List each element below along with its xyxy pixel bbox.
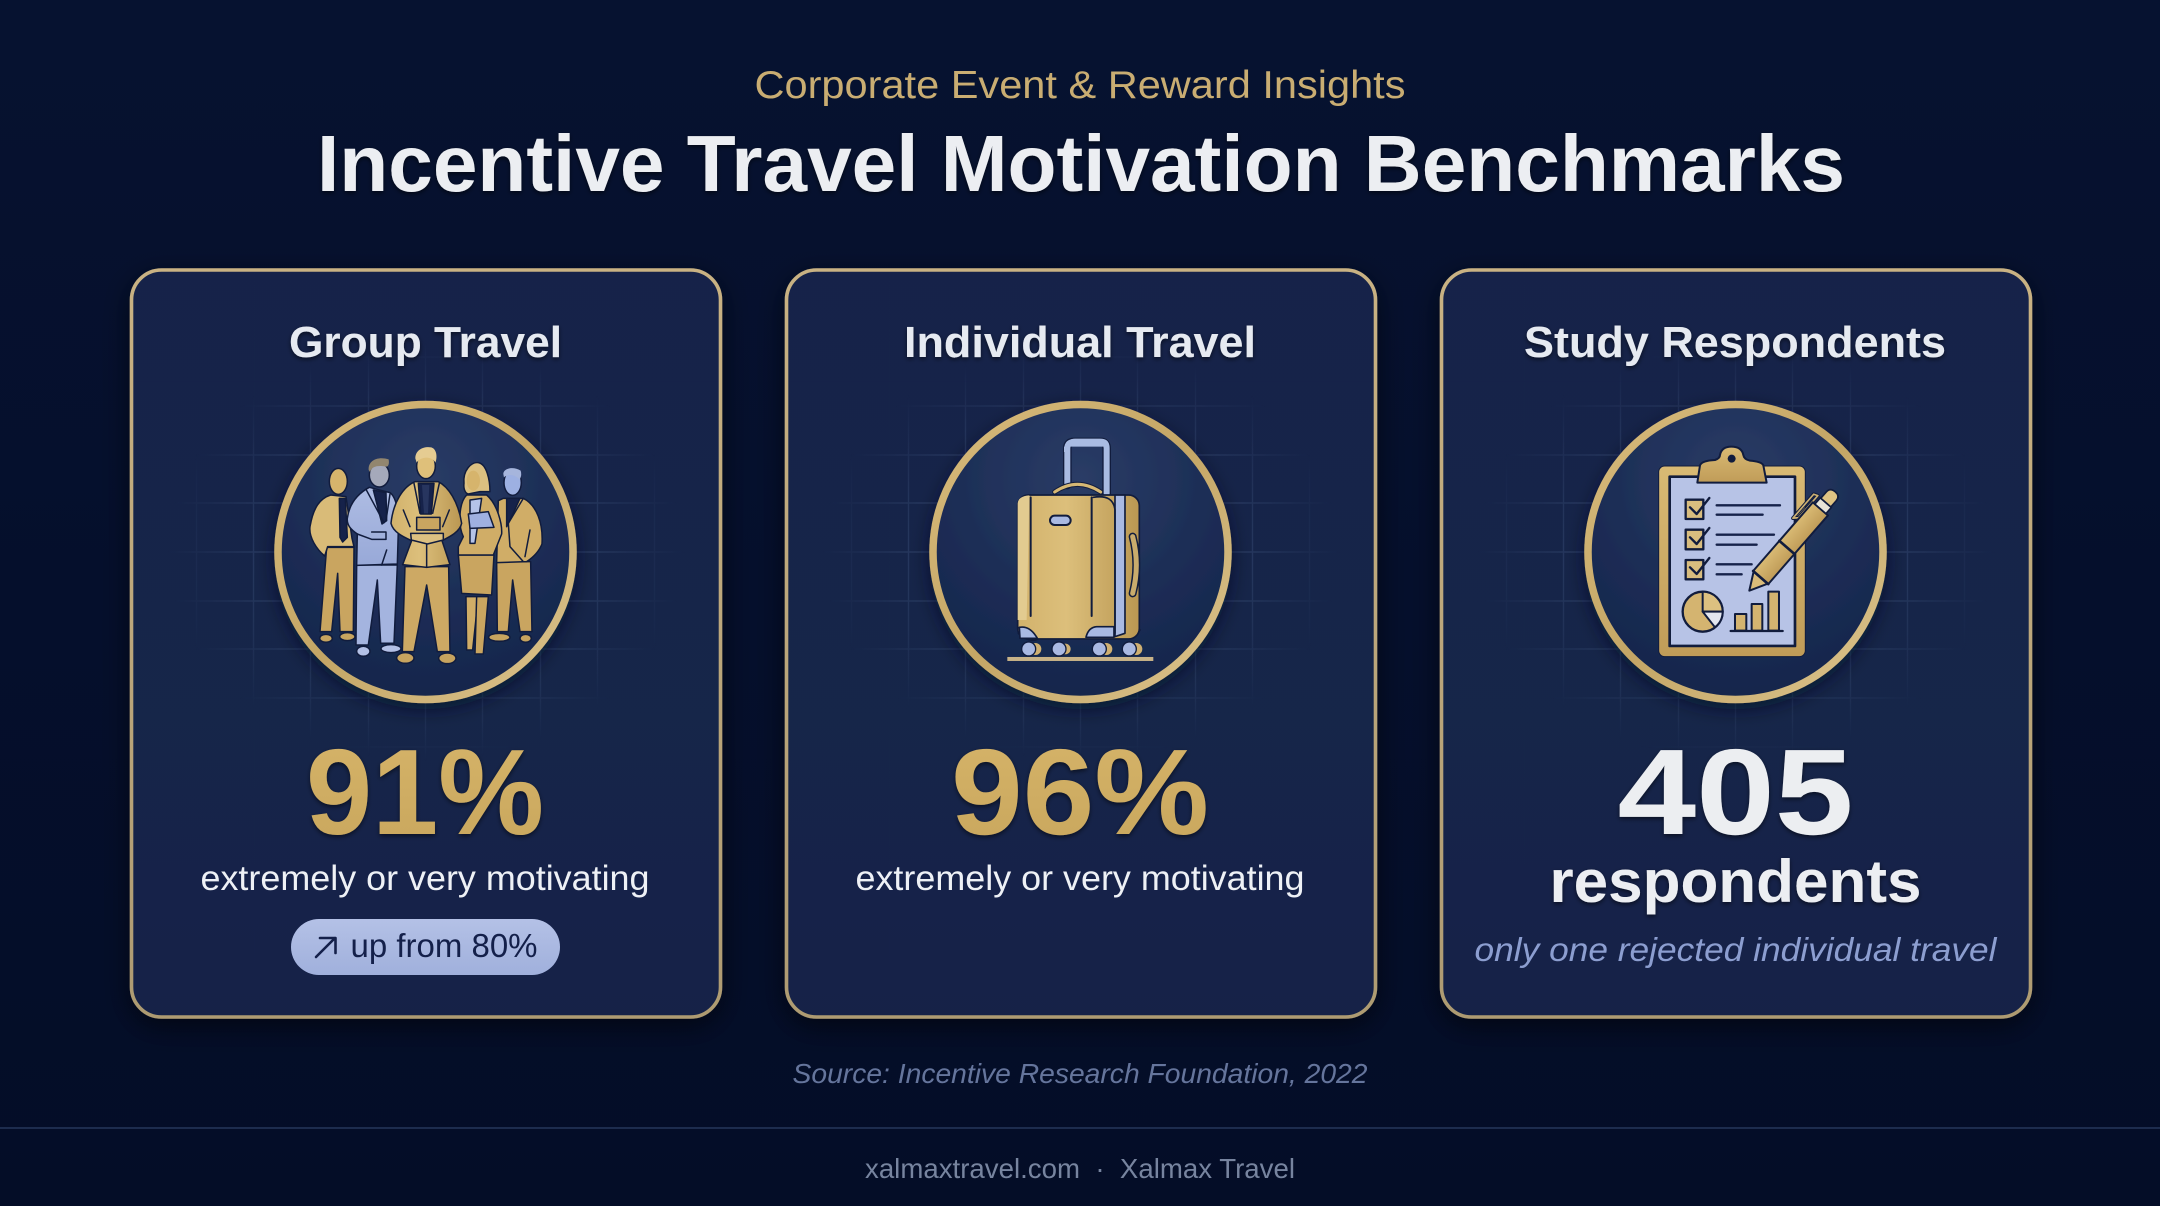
source note: Source: Incentive Research Foundation, 2022 xyxy=(792,1058,1368,1089)
figure: woman with folder xyxy=(458,463,502,654)
caption: motivation individual: extremely or very motivating xyxy=(856,859,1304,898)
icon: suitcase in gold ring xyxy=(933,404,1228,700)
stat: 96 percent: 96% xyxy=(951,724,1209,860)
figure: central man with tablet xyxy=(391,447,462,664)
label: respondents: respondents xyxy=(1550,848,1922,915)
icon: business group in gold ring xyxy=(278,404,573,700)
stat: 405: 405 xyxy=(1618,724,1854,860)
badge: up from 80 percent: up from 80% xyxy=(350,927,538,964)
panel: group travel xyxy=(132,270,720,1017)
title: Incentive Travel Motivation Benchmarks xyxy=(317,119,1845,208)
icon: arrow up right xyxy=(316,938,336,957)
stat: 91 percent: 91% xyxy=(306,724,544,860)
note: only one rejected: only one rejected individual travel xyxy=(1474,931,1998,968)
figure: far right man xyxy=(489,468,542,642)
badge: up from 80 percent xyxy=(291,919,560,975)
heading: study respondents: Study Respondents xyxy=(1524,318,1946,367)
heading: individual travel: Individual Travel xyxy=(904,318,1256,367)
figure: far left man xyxy=(310,468,355,642)
caption: motivation group: extremely or very motivating xyxy=(200,859,650,898)
footer text: xalmaxtravel.com · Xalmax Travel xyxy=(865,1153,1295,1184)
footer divider xyxy=(0,1127,2160,1129)
panel: individual travel xyxy=(786,270,1376,1017)
panel: study respondents xyxy=(1442,270,2030,1017)
icon: clipboard and pen in gold ring xyxy=(1588,404,1883,700)
pen xyxy=(1738,482,1843,597)
heading: group travel: Group Travel xyxy=(289,318,562,367)
figure: blue suit man xyxy=(347,458,401,656)
eyebrow subtitle: Corporate Event & Reward Insights xyxy=(754,64,1406,107)
